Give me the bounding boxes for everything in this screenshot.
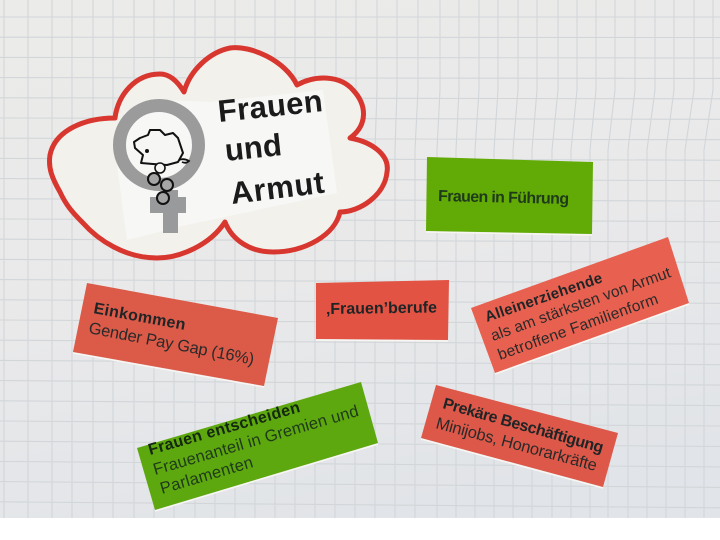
panel: Frauenberufe: ‚Frauen’berufe (326, 299, 437, 318)
panel: Prekäre Beschäftigung: Prekäre Beschäftigung (441, 395, 605, 457)
panel: Frauen entscheiden: Frauenanteil in Gremien und (151, 402, 361, 479)
title: Frauen (216, 83, 324, 129)
panel: Prekäre Beschäftigung: Minijobs, Honorarkräfte (434, 414, 599, 475)
icon: female symbol with piggy bank (120, 106, 198, 233)
title: und (223, 127, 283, 168)
panel: Frauen in Führung (426, 157, 593, 235)
panel: Alleinerziehende (471, 237, 689, 374)
panel: Einkommen: Einkommen (92, 300, 187, 334)
panel: Frauen entscheiden: Frauen entscheiden (146, 399, 302, 459)
panel: Frauenberufe (316, 280, 449, 341)
panel: Einkommen (73, 283, 278, 387)
panel: Alleinerziehende: betroffene Familienform (496, 291, 660, 364)
title paper sheet (115, 90, 337, 240)
panel: Frauen entscheiden: Parlamenten (158, 453, 255, 498)
panel: Frauen in Führung: Frauen in Führung (438, 188, 569, 208)
panel: title cloud (49, 48, 387, 258)
panel: Alleinerziehende: Alleinerziehende (483, 270, 605, 326)
title (216, 83, 326, 211)
panel: Prekäre Beschäftigung (421, 385, 618, 488)
title: Armut (229, 165, 326, 211)
panel: Frauen entscheiden (137, 382, 378, 511)
panel: Einkommen: Gender Pay Gap (16%) (87, 319, 256, 369)
panel: Alleinerziehende: als am stärksten von Armut (489, 264, 674, 345)
